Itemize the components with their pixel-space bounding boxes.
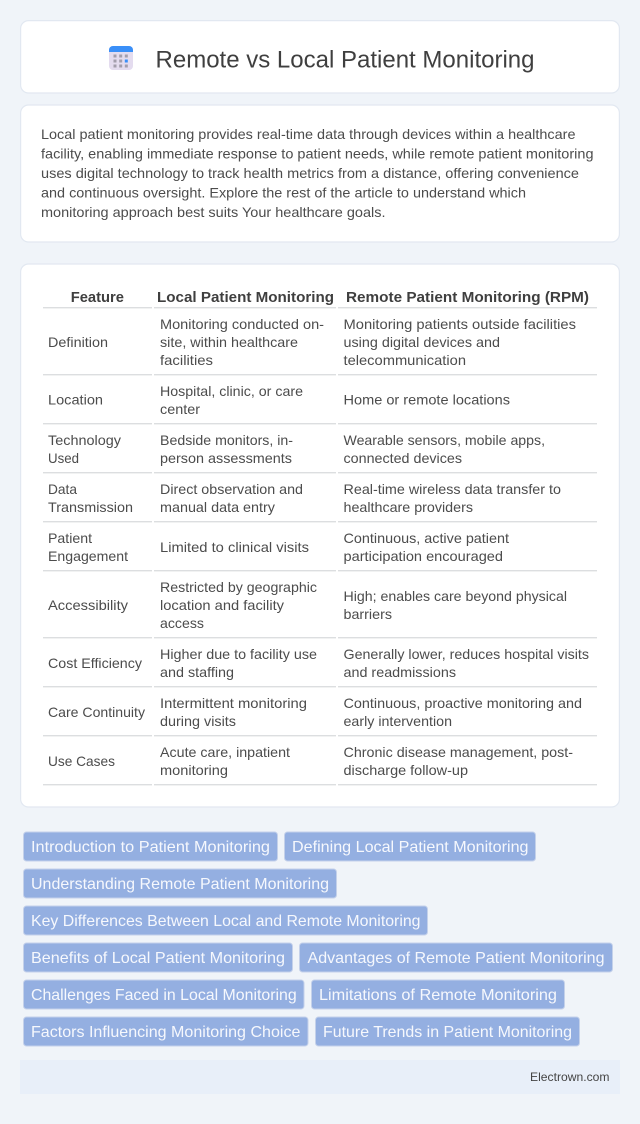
table row: Accessibility: Accessibility	[48, 597, 128, 613]
table row: Care Continuity: early intervention	[344, 713, 452, 729]
table row: Accessibility: location and facility	[160, 597, 284, 613]
table row: Use Cases: discharge follow-up	[344, 762, 468, 778]
table header row: Remote Patient Monitoring (RPM)	[346, 289, 589, 306]
panel: introduction	[21, 105, 619, 242]
footer: Electrown.com	[530, 1070, 610, 1084]
tag: Future Trends in Patient Monitoring	[316, 1017, 580, 1046]
tag: Factors Influencing Monitoring Choice: Factors Influencing Monitoring Choice	[31, 1024, 301, 1041]
table row: Location: Home or remote locations	[344, 392, 510, 408]
table row: Accessibility: barriers	[344, 606, 392, 622]
tag: Defining Local Patient Monitoring: Defining Local Patient Monitoring	[292, 839, 528, 856]
tag: Introduction to Patient Monitoring: Introduction to Patient Monitoring	[31, 839, 270, 856]
table header row: Local Patient Monitoring	[157, 289, 334, 306]
table row: Patient Engagement: participation encouraged	[344, 548, 503, 564]
table row: Use Cases: Acute care, inpatient	[160, 744, 290, 760]
table row: Care Continuity: during visits	[160, 713, 236, 729]
table row: Location: Hospital, clinic, or care	[160, 383, 303, 399]
table row: Location	[43, 383, 597, 424]
table row: Location: Location	[48, 392, 103, 408]
table row: Care Continuity	[43, 695, 597, 736]
table row: Patient Engagement	[43, 530, 597, 571]
tag: Understanding Remote Patient Monitoring	[24, 869, 336, 898]
table row: Patient Engagement: Patient	[48, 530, 92, 546]
tag: Benefits of Local Patient Monitoring: Benefits of Local Patient Monitoring	[31, 950, 285, 967]
table row: Accessibility	[43, 579, 597, 638]
panel: topic tags	[24, 832, 612, 1046]
title: Remote vs Local Patient Monitoring	[156, 46, 534, 74]
table row: Technology Used: person assessments	[160, 450, 292, 466]
table row: Location: center	[160, 401, 200, 417]
table row: Cost Efficiency: Generally lower, reduces hospital visits	[344, 646, 589, 662]
text block: introduction paragraph: monitoring approach best suits Your healthcare goals.	[41, 204, 386, 220]
text block: introduction paragraph: Local patient monitoring provides real-time data through devices within a healthcare	[41, 126, 576, 142]
table row: Accessibility: access	[160, 615, 204, 631]
table row: Definition: facilities	[160, 352, 213, 368]
table row: Cost Efficiency: Higher due to facility use	[160, 646, 317, 662]
table row: Use Cases: Use Cases	[48, 753, 115, 769]
tag: Limitations of Remote Monitoring: Limitations of Remote Monitoring	[319, 987, 557, 1004]
tag: Factors Influencing Monitoring Choice	[24, 1017, 308, 1046]
table row: Definition: using digital devices and	[344, 334, 500, 350]
table header row: Feature	[71, 289, 124, 306]
table row: Care Continuity: Continuous, proactive monitoring and	[344, 695, 582, 711]
table row: Data Transmission: healthcare providers	[344, 499, 473, 515]
table row: Cost Efficiency: and staffing	[160, 664, 234, 680]
tag: Limitations of Remote Monitoring	[312, 980, 564, 1009]
table row: Definition: Monitoring patients outside facilities	[344, 316, 576, 332]
panel: title header	[21, 21, 619, 93]
tag: Key Differences Between Local and Remote Monitoring: Key Differences Between Local and Remote Monitoring	[31, 913, 420, 930]
table row: Patient Engagement: Limited to clinical visits	[160, 539, 309, 555]
tag: Benefits of Local Patient Monitoring	[24, 943, 292, 972]
table row: Use Cases	[43, 744, 597, 785]
table row: Use Cases: monitoring	[160, 762, 228, 778]
tag: Challenges Faced in Local Monitoring	[24, 980, 304, 1009]
tag: Understanding Remote Patient Monitoring: Understanding Remote Patient Monitoring	[31, 876, 329, 893]
table row: Technology Used: connected devices	[344, 450, 462, 466]
footer	[20, 1060, 620, 1094]
tag: Introduction to Patient Monitoring	[24, 832, 278, 861]
tag: Advantages of Remote Patient Monitoring: Advantages of Remote Patient Monitoring	[308, 950, 604, 967]
table row: Technology Used: Used	[48, 450, 79, 466]
tag: Challenges Faced in Local Monitoring: Challenges Faced in Local Monitoring	[31, 987, 297, 1004]
table row: Data Transmission: manual data entry	[160, 499, 275, 515]
tag: Key Differences Between Local and Remote Monitoring	[24, 906, 428, 935]
tag: Defining Local Patient Monitoring	[284, 832, 536, 861]
table row: Data Transmission: Transmission	[48, 499, 133, 515]
table row: Definition: Monitoring conducted on-	[160, 316, 324, 332]
tag: Future Trends in Patient Monitoring: Future Trends in Patient Monitoring	[323, 1024, 572, 1041]
table row: Data Transmission: Direct observation and	[160, 481, 303, 497]
text block: introduction paragraph: uses digital technology to track health metrics from a distance, offering convenience	[41, 165, 579, 181]
table row: Definition: Definition	[48, 334, 108, 350]
table row: Technology Used	[43, 432, 597, 473]
table row: Technology Used: Technology	[48, 432, 121, 448]
text block: introduction paragraph	[41, 126, 594, 220]
icon: calendar	[109, 46, 133, 70]
table row: Cost Efficiency: and readmissions	[344, 664, 456, 680]
table row: Cost Efficiency	[43, 646, 597, 687]
table row: Accessibility: High; enables care beyond physical	[344, 588, 567, 604]
table row: Care Continuity: Care Continuity	[48, 704, 145, 720]
table row: Technology Used: Wearable sensors, mobile apps,	[344, 432, 545, 448]
table row: Use Cases: Chronic disease management, post-	[344, 744, 573, 760]
table row: Patient Engagement: Engagement	[48, 548, 128, 564]
table row: Definition: telecommunication	[344, 352, 466, 368]
table row: Data Transmission: Data	[48, 481, 77, 497]
text block: introduction paragraph: facility, enabling immediate response to patient needs, while remote patient monitoring	[41, 146, 594, 162]
tag: Advantages of Remote Patient Monitoring	[300, 943, 612, 972]
text block: introduction paragraph: and continuous oversight. Explore the rest of the article to understand which	[41, 184, 526, 200]
table header row	[43, 289, 597, 308]
table row: Cost Efficiency: Cost Efficiency	[48, 655, 142, 671]
table row: Definition: site, within healthcare	[160, 334, 298, 350]
table row: Technology Used: Bedside monitors, in-	[160, 432, 293, 448]
table row: Definition	[43, 316, 597, 375]
table row: Data Transmission: Real-time wireless data transfer to	[344, 481, 561, 497]
table row: Patient Engagement: Continuous, active patient	[344, 530, 509, 546]
panel: comparison table	[21, 264, 619, 807]
table row: Data Transmission	[43, 481, 597, 522]
table row: Care Continuity: Intermittent monitoring	[160, 695, 307, 711]
table row: Accessibility: Restricted by geographic	[160, 579, 317, 595]
